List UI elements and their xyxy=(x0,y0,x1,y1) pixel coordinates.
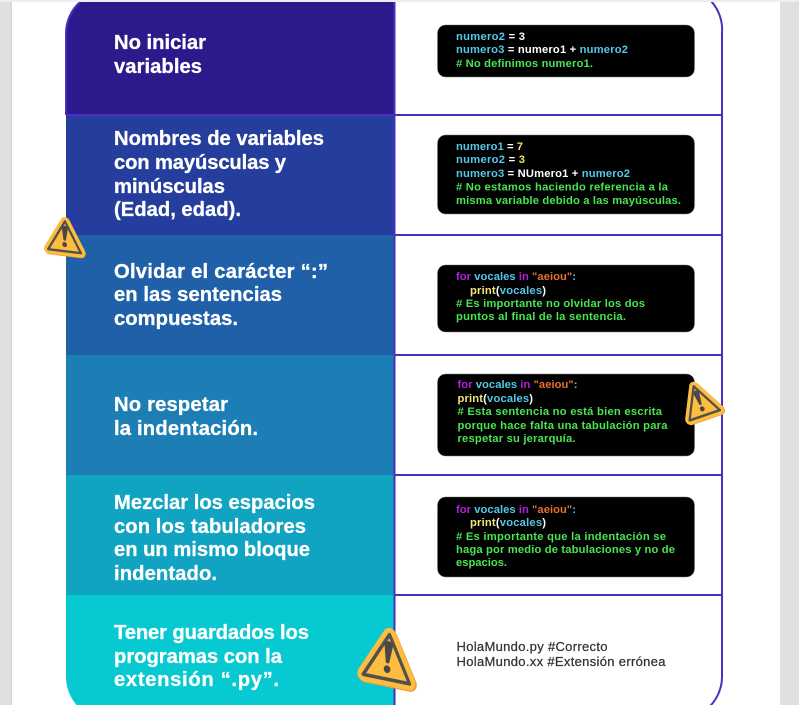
heading: con los tabuladores xyxy=(114,516,306,538)
code box xyxy=(438,265,694,332)
top strip of page xyxy=(0,0,799,2)
code box xyxy=(438,497,694,577)
file names: HolaMundo.xx #Extensión errónea xyxy=(456,654,666,669)
code box: # Es importante que la indentación se xyxy=(456,531,666,543)
code box xyxy=(438,374,694,456)
code box: misma variable debido a las mayúsculas. xyxy=(456,195,681,207)
code box: puntos al final de la sentencia. xyxy=(456,311,626,323)
heading: en las sentencias xyxy=(114,284,282,306)
heading: extensión “.py”. xyxy=(114,669,279,691)
row 3: olvidar dos puntos xyxy=(114,261,694,332)
code box: for vocales in "aeiou": xyxy=(458,379,578,391)
left column colour rows xyxy=(66,0,394,705)
code box: respetar su jerarquía. xyxy=(458,433,576,445)
row 5: espacios y tabuladores xyxy=(114,492,694,585)
code box: # Esta sentencia no está bien escrita xyxy=(458,406,663,418)
code box xyxy=(438,25,694,77)
code box: numero2 = 3 xyxy=(456,154,525,166)
heading: Tener guardados los xyxy=(114,622,309,644)
code box: porque hace falta una tabulación para xyxy=(458,420,668,432)
icon: warning left xyxy=(48,219,82,253)
heading: Nombres de variables xyxy=(114,128,324,150)
row 2: mayúsculas y minúsculas xyxy=(114,128,694,221)
code box: print(vocales) xyxy=(458,393,533,405)
icon: warning right xyxy=(678,381,720,421)
heading: No respetar xyxy=(114,394,228,416)
heading: No iniciar xyxy=(114,32,206,54)
file names xyxy=(456,639,666,669)
heading: Mezclar los espacios xyxy=(114,492,315,514)
code box: print(vocales) xyxy=(470,517,546,529)
heading: la indentación. xyxy=(114,418,258,440)
icon: warning bottom xyxy=(363,630,413,684)
heading: (Edad, edad). xyxy=(114,199,241,221)
row 4: indentación xyxy=(114,374,694,456)
code box: print(vocales) xyxy=(470,285,546,297)
heading: con mayúsculas y xyxy=(114,152,287,174)
code box: for vocales in "aeiou": xyxy=(456,271,576,283)
code box: # Es importante no olvidar los dos xyxy=(456,298,645,310)
heading: programas con la xyxy=(114,646,283,668)
code box: # No definimos numero1. xyxy=(456,58,593,70)
code box: numero3 = numero1 + numero2 xyxy=(456,44,628,56)
code box: for vocales in "aeiou": xyxy=(456,504,576,516)
heading: indentado. xyxy=(114,563,217,585)
code box: haga por medio de tabulaciones y no de xyxy=(456,544,675,556)
file names: HolaMundo.py #Correcto xyxy=(456,639,608,654)
heading: compuestas. xyxy=(114,308,238,330)
heading: minúsculas xyxy=(114,176,225,198)
code box: espacios. xyxy=(456,557,507,569)
heading: Olvidar el carácter “:” xyxy=(114,261,328,283)
code box: numero1 = 7 xyxy=(456,141,523,153)
code box: numero2 = 3 xyxy=(456,31,525,43)
heading: en un mismo bloque xyxy=(114,539,310,561)
heading: variables xyxy=(114,56,202,78)
code box xyxy=(438,135,694,214)
row 6: extensión .py xyxy=(114,622,666,691)
code box: numero3 = NUmero1 + numero2 xyxy=(456,168,630,180)
row 1: no iniciar variables xyxy=(114,25,694,78)
code box: # No estamos haciendo referencia a la xyxy=(456,182,669,194)
